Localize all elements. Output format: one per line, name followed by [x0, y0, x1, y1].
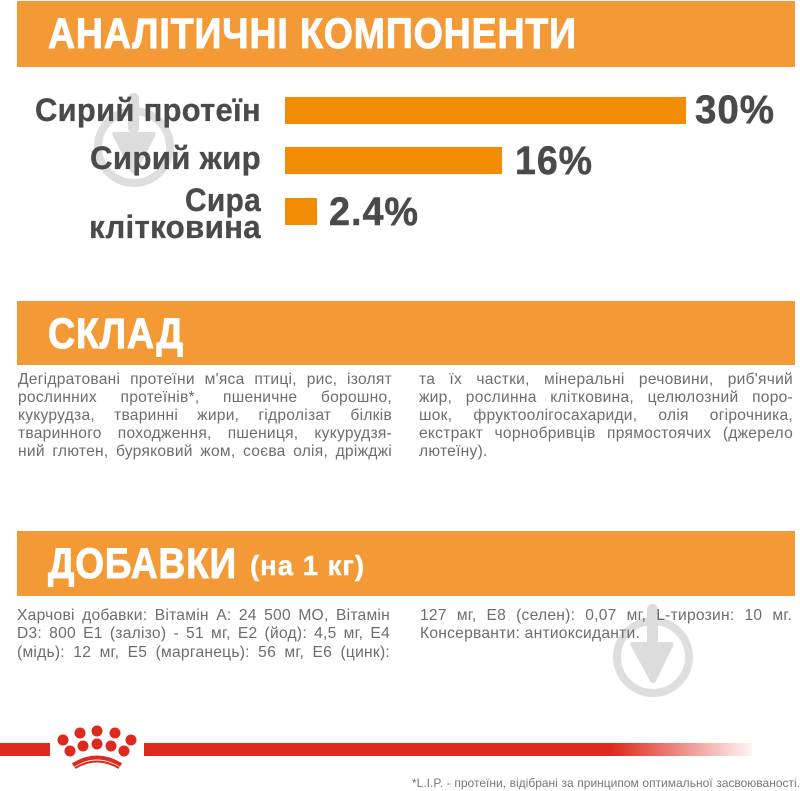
- row: crude fat: [90, 139, 593, 183]
- row: crude fibre: Сира: [185, 182, 261, 218]
- row: crude protein: [35, 88, 775, 132]
- footnote: *L.I.P. - протеїни, відібрані за принципом оптимальної засвоюваності.: [412, 776, 800, 790]
- panel: heading analytical components: АНАЛІТИЧНІ КОМПОНЕНТИ: [48, 10, 577, 58]
- text block: composition right column: та їх частки, мінеральні речовини, риб'ячий: [419, 371, 793, 388]
- text block: composition right column: [419, 371, 793, 460]
- row: crude protein: 30%: [695, 88, 775, 132]
- text block: additives left column: [17, 607, 390, 661]
- panel: heading analytical components: [17, 1, 795, 67]
- icon: royal canin crown: [58, 726, 136, 768]
- text block: composition right column: екстракт чорнобривців прямостоячих (джерело: [419, 425, 793, 442]
- row: crude fibre: клітковина: [89, 209, 261, 245]
- text block: additives right column: Консерванти: антиоксиданти.: [420, 625, 640, 642]
- text block: composition left column: Дегідратовані протеїни м'яса птиці, рис, ізолят: [18, 371, 392, 388]
- row: crude fat: Сирий жир: [90, 140, 261, 176]
- bar chart: analytical components: [35, 88, 775, 245]
- text block: composition right column: шок, фруктоолігосахариди, олія огірочника,: [419, 407, 793, 424]
- icon: watermark download top: [98, 93, 170, 183]
- row: crude fat: 16%: [515, 139, 593, 183]
- text block: additives right column: 127 мг, Е8 (селен): 0,07 мг, L-тирозин: 10 мг.: [420, 607, 792, 624]
- text block: composition left column: кукурудза, тваринні жири, гідролізат білків: [18, 407, 392, 424]
- icon: watermark download bottom: [617, 604, 689, 693]
- text block: additives left column: (мідь): 12 мг, Е5 (марганець): 56 мг, Е6 (цинк):: [17, 644, 390, 661]
- text block: composition left column: ний глютен, буряковий жом, соєва олія, дріжджі: [18, 443, 392, 460]
- text block: composition left column: тваринного походження, пшениця, кукурудзя-: [18, 425, 392, 442]
- red ribbon: [0, 743, 752, 756]
- panel: heading additives: [17, 531, 795, 596]
- row: crude protein: Сирий протеїн: [35, 92, 261, 128]
- text block: composition left column: [18, 371, 392, 460]
- row: crude fibre: 2.4%: [329, 190, 419, 234]
- panel: heading additives: (на 1 кг): [250, 550, 365, 581]
- panel: heading composition: [17, 301, 795, 365]
- text block: composition right column: лютеїну).: [419, 443, 488, 460]
- text block: additives right column: [420, 607, 792, 642]
- text block: additives left column: D3: 800 Е1 (залізо) - 51 мг, Е2 (йод): 4,5 мг, Е4: [17, 625, 390, 642]
- text block: additives left column: Харчові добавки: Вітамін А: 24 500 МО, Вітамін: [17, 607, 390, 624]
- text block: composition left column: рослинних протеїнів*, пшеничне борошно,: [18, 389, 392, 406]
- row: crude fibre: [89, 182, 419, 245]
- text block: composition right column: жир, рослинна клітковина, целюлозний поро-: [419, 389, 793, 406]
- panel: heading composition: СКЛАД: [48, 310, 184, 358]
- panel: heading additives: ДОБАВКИ: [48, 540, 237, 588]
